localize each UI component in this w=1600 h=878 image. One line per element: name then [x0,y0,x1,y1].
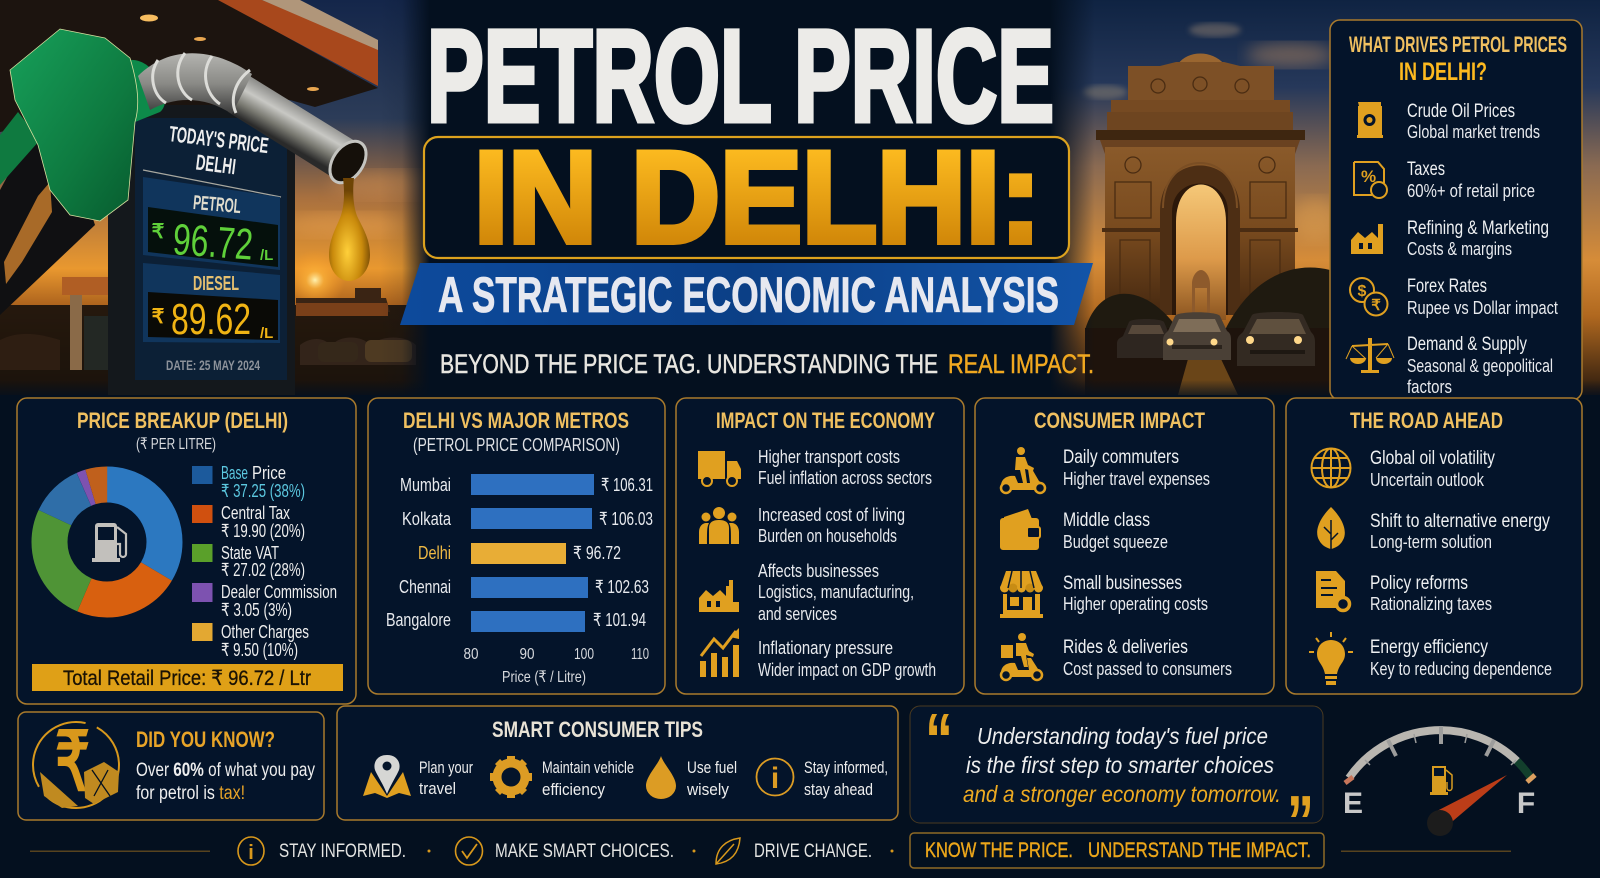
road: energy efficiency: Key to reducing dependence [1370,658,1552,679]
legend: Base [221,463,248,483]
panel: price breakup: (₹ PER LITRE) [136,436,216,453]
diesel display: DIESEL [193,273,239,295]
legend: Central Tax [221,503,290,523]
title [424,2,1069,270]
panel: did you know: Over 60% of what you pay [136,760,315,781]
petrol nozzle [0,29,373,315]
panel: did you know [18,712,324,820]
sign heading: TODAY'S PRICE [168,121,270,158]
consumer: commuters [1001,447,1210,493]
consumer: commuters: Higher travel expenses [1063,468,1210,489]
bar chart [386,474,653,686]
consumer: middle class: Middle class [1063,510,1150,531]
diesel display: 89.62 [171,295,251,344]
road: alternative energy [1317,507,1550,552]
tip: use fuel wisely [646,756,737,799]
title box [424,137,1069,258]
legend: ₹ 27.02 (28%) [221,560,305,580]
road: oil volatility [1312,448,1495,490]
impact: inflation: Inflationary pressure [758,637,893,658]
consumer: middle class: Budget squeeze [1063,531,1168,552]
panel: impact on the economy: IMPACT ON THE ECONOMY [716,408,935,433]
bar chart: Kolkata [402,509,452,529]
bar chart: ₹ 102.63 [595,577,649,597]
impact: inflation: Wider impact on GDP growth [758,659,936,680]
tip: maintain vehicle: Maintain vehicle [542,758,634,777]
tip: plan your travel: travel [419,779,456,798]
driver: demand and supply: factors [1407,376,1452,397]
icon: rupee coin: ₹ [55,717,90,808]
panel: delhi vs metros: (PETROL PRICE COMPARISON) [413,435,620,455]
call to action box: KNOW THE PRICE. [925,839,1073,862]
panel: consumer impact: CONSUMER IMPACT [1034,408,1205,433]
driver: forex: ₹ [1371,297,1381,314]
panel: smart consumer tips [337,706,898,820]
panel: price breakup [17,398,356,704]
petrol display [143,177,280,270]
panel: the road ahead [1286,398,1582,694]
legend: Other Charges [221,622,309,642]
subtitle ribbon [400,263,1093,325]
driver: taxes: % [1361,167,1376,186]
title: IN DELHI: [474,124,1041,270]
road: energy efficiency: Energy efficiency [1370,637,1488,658]
consumer: deliveries [1001,633,1232,680]
consumer: small businesses: Small businesses [1063,573,1182,594]
tip: plan your travel [363,755,473,798]
tip: stay informed: i [771,762,779,795]
bar chart: 110 [631,646,649,663]
impact: inflation [700,628,936,680]
cars [1117,312,1315,366]
road: oil volatility: Global oil volatility [1370,448,1495,469]
driver: taxes [1354,159,1535,201]
icon: pump [92,523,126,562]
consumer: deliveries: Rides & deliveries [1063,637,1188,658]
fuel drop [329,178,370,281]
road: policy reforms [1316,571,1492,614]
driver: demand and supply: Seasonal & geopolitical [1407,355,1553,376]
tip: use fuel wisely: Use fuel [687,758,737,777]
driver: refining: Costs & margins [1407,238,1512,259]
icon: rupee coin [33,717,119,808]
driver: crude oil: Crude Oil Prices [1407,101,1515,122]
driver: taxes: Taxes [1407,159,1445,180]
driver: forex [1350,276,1558,318]
bar chart: ₹ 106.31 [601,475,653,495]
bar chart: ₹ 106.03 [599,509,653,529]
fuel gauge: E [1343,787,1363,820]
scene: petrol station at sunset [0,0,460,395]
driver: crude oil [1357,101,1540,142]
panel: quote: and a stronger economy tomorrow. [963,781,1281,807]
impact: transport: Higher transport costs [758,446,900,467]
panel: what drives petrol prices: IN DELHI? [1399,58,1487,86]
panel: smart consumer tips: SMART CONSUMER TIPS [492,717,703,742]
bar chart: 80 [464,646,479,663]
dome and attic [1178,54,1224,64]
legend: ₹ 9.50 (10%) [221,640,298,660]
opening quote mark: “ [925,698,953,781]
call to action box [910,833,1324,868]
impact: businesses: Affects businesses [758,560,879,581]
impact: businesses [699,560,914,624]
gauge pump icon [1430,766,1452,795]
subtitle ribbon: A STRATEGIC ECONOMIC ANALYSIS [438,267,1059,323]
bar chart: Delhi [418,543,451,563]
driver: demand and supply: Demand & Supply [1407,334,1527,355]
impact: businesses: and services [758,603,837,624]
panel: impact on the economy [676,398,964,694]
consumer: middle class [1000,509,1168,552]
driver: refining [1351,218,1549,259]
tagline: BEYOND THE PRICE TAG. UNDERSTANDING THE [440,349,938,379]
impact: cost of living: Burden on households [758,525,897,546]
impact: businesses: Logistics, manufacturing, [758,581,914,602]
driver: forex: Rupee vs Dollar impact [1407,297,1558,318]
price sign [108,105,295,395]
driver: forex: $ [1358,283,1367,300]
panel: consumer impact [975,398,1274,694]
petrol display: /L [260,247,273,264]
call to action box: UNDERSTAND THE IMPACT. [1088,839,1311,862]
legend: ₹ 19.90 (20%) [221,521,305,541]
petrol display: ₹ [152,221,165,243]
legend: Dealer Commission [221,582,337,602]
consumer: small businesses [1000,571,1208,618]
center dark backdrop [380,0,1110,400]
bar chart: ₹ 96.72 [573,543,621,563]
footer strip: MAKE SMART CHOICES. [495,841,674,862]
tip: stay informed [756,758,888,799]
impact: cost of living: Increased cost of living [758,504,905,525]
title: PETROL PRICE [427,2,1054,149]
sign heading [165,121,270,183]
donut chart [50,484,164,600]
impact: transport: Fuel inflation across sectors [758,467,932,488]
road: energy efficiency [1309,632,1552,685]
bar chart: Chennai [399,577,451,597]
icon: info: i [248,842,254,864]
legend [192,463,337,660]
fuel gauge [1343,726,1535,836]
petrol display: 96.72 [171,215,255,270]
bar chart: 100 [574,646,594,663]
closing quote mark: ” [1287,780,1314,863]
icon: info [238,837,264,865]
panel: did you know: for petrol is tax! [136,783,245,804]
tip: use fuel wisely: wisely [686,780,729,799]
road: policy reforms: Policy reforms [1370,573,1468,594]
consumer: deliveries: Cost passed to consumers [1063,658,1232,679]
fuel gauge: F [1517,787,1535,820]
panel: quote: is the first step to smarter choices [966,752,1274,778]
legend: State VAT [221,543,279,563]
tip: plan your travel: Plan your [419,758,473,777]
total price bar: Total Retail Price: ₹ 96.72 / Ltr [63,667,311,690]
bar chart: Bangalore [386,610,451,630]
tip: maintain vehicle [490,756,634,799]
footer strip: DRIVE CHANGE. [754,841,872,862]
tip: stay informed: Stay informed, [804,758,888,777]
driver: crude oil: Global market trends [1407,121,1540,142]
panel: quote [910,698,1323,863]
bar chart: ₹ 101.94 [593,610,646,630]
panel: the road ahead: THE ROAD AHEAD [1350,408,1503,433]
consumer: small businesses: Higher operating costs [1063,593,1208,614]
tagline: REAL IMPACT. [948,349,1094,379]
panel: what drives petrol prices [1330,20,1582,400]
driver: refining: Refining & Marketing [1407,218,1549,239]
diesel display: /L [260,325,273,342]
panel: delhi vs metros: DELHI VS MAJOR METROS [403,408,629,433]
sign date: DATE: 25 MAY 2024 [166,357,260,373]
road: alternative energy: Long-term solution [1370,531,1492,552]
canopy [0,0,378,132]
legend: ₹ 3.05 (3%) [221,600,292,620]
legend: ₹ 37.25 (38%) [221,481,305,501]
panel: delhi vs metros [368,398,665,694]
consumer: commuters: Daily commuters [1063,447,1179,468]
diesel display [143,263,280,344]
sign heading: DELHI [194,150,237,179]
petrol display: PETROL [192,192,242,218]
panel: quote: Understanding today's fuel price [977,723,1268,749]
road: oil volatility: Uncertain outlook [1370,469,1485,490]
footer strip: STAY INFORMED. [279,841,406,862]
legend: Price [252,463,286,483]
footer strip [30,833,1511,868]
icon: leaf [716,838,740,864]
scene: India Gate at dusk [1000,0,1600,395]
driver: forex: Forex Rates [1407,276,1487,297]
impact: transport [698,446,932,488]
diesel display: ₹ [152,306,165,328]
bar chart: Mumbai [400,475,451,495]
icon: check [456,837,482,865]
tip: maintain vehicle: efficiency [542,780,605,799]
driver: demand and supply [1346,334,1553,397]
bar chart: 90 [520,646,535,663]
bar chart: Price (₹ / Litre) [502,669,586,686]
panel: price breakup: PRICE BREAKUP (DELHI) [77,408,288,433]
impact: cost of living [699,504,905,546]
road: policy reforms: Rationalizing taxes [1370,593,1492,614]
panel: did you know: DID YOU KNOW? [136,727,275,752]
driver: taxes: 60%+ of retail price [1407,180,1535,201]
tip: stay informed: stay ahead [804,780,873,799]
road: alternative energy: Shift to alternative energy [1370,511,1550,532]
